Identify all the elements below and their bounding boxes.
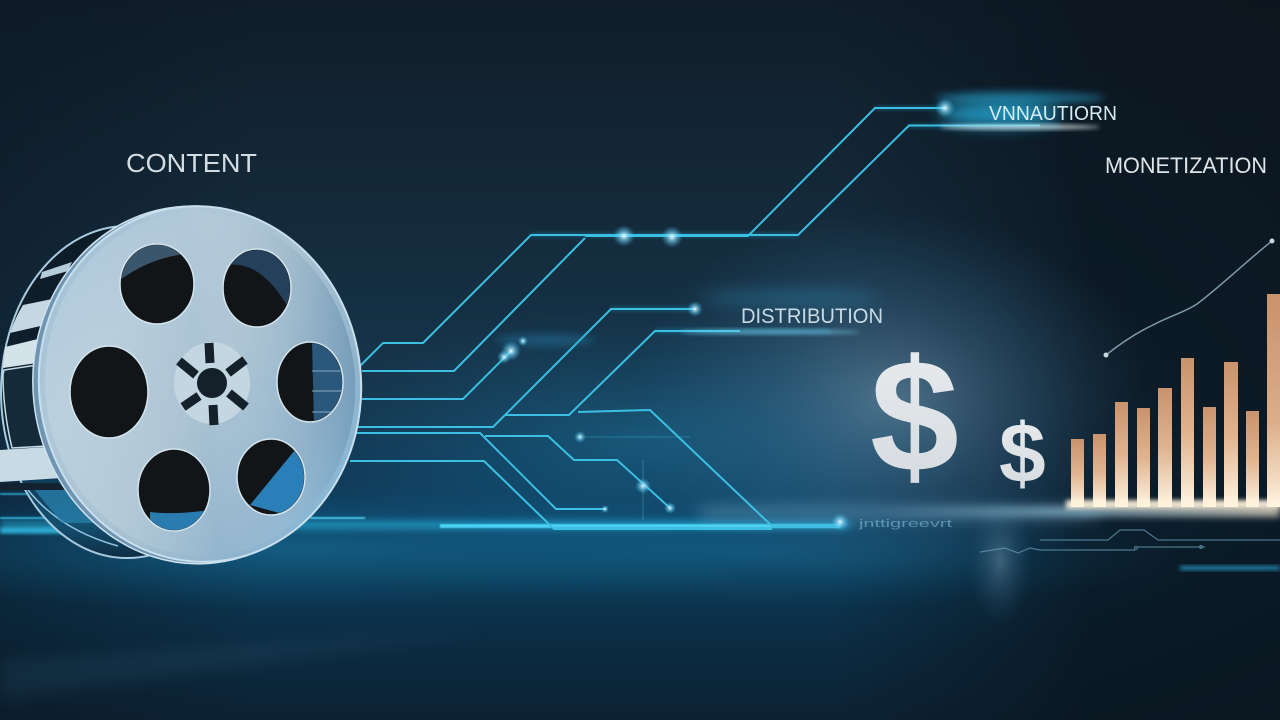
line: upper path to valuation bbox=[360, 126, 1040, 366]
reel back drum bbox=[0, 226, 253, 558]
trend line bbox=[1104, 238, 1274, 358]
film stripe one bbox=[10, 298, 57, 333]
small dollar sign: $ bbox=[999, 406, 1046, 500]
line: second path to valuation bbox=[362, 108, 945, 371]
lower right circuit traces bbox=[980, 530, 1280, 553]
line: branch one bbox=[355, 433, 605, 509]
reel hole details bbox=[120, 240, 345, 535]
film stripe two bbox=[3, 338, 42, 368]
label: content: CONTENT bbox=[126, 148, 257, 178]
light glows on circuit bbox=[495, 92, 1105, 531]
line: distribution lower bbox=[505, 331, 740, 415]
line: short branch bbox=[362, 350, 512, 399]
label: valuation: VNNAUTIORN bbox=[989, 103, 1117, 125]
floor light streaks bbox=[0, 493, 1280, 570]
line: distribution upper bbox=[358, 309, 695, 427]
reel hub bbox=[174, 342, 250, 425]
film strip lower bbox=[0, 447, 62, 482]
reel rim bbox=[15, 190, 375, 580]
line: branch two bbox=[485, 436, 670, 508]
line: faint branch bbox=[580, 436, 690, 438]
film stripe three bbox=[40, 262, 72, 279]
label: distribution: DISTRIBUTION bbox=[741, 305, 883, 328]
line: bottom bbox=[350, 461, 772, 529]
reel face bbox=[21, 190, 379, 578]
line: distribution lower fade bbox=[740, 330, 880, 332]
line: lower right to floor bbox=[578, 410, 840, 526]
film frame bbox=[3, 365, 47, 448]
faint floor caption: jnttigreevrt bbox=[857, 518, 952, 530]
reel holes bbox=[70, 244, 343, 531]
large dollar sign: $ bbox=[870, 326, 959, 505]
film reel bbox=[0, 205, 362, 565]
bar chart bbox=[1066, 294, 1280, 509]
circuit lines bbox=[350, 108, 1060, 529]
label: monetization: MONETIZATION bbox=[1105, 153, 1267, 178]
